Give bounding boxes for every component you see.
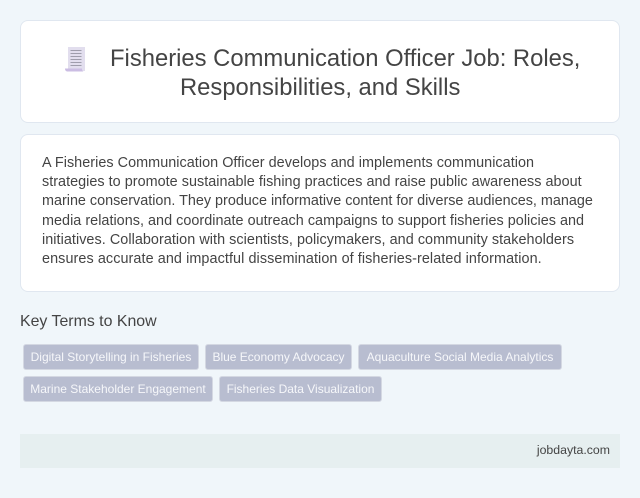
description text: A Fisheries Communication Officer develops and implements communication	[42, 155, 534, 171]
tag	[23, 376, 213, 402]
tag: Marine Stakeholder Engagement	[30, 382, 206, 396]
panel: title header	[20, 20, 620, 123]
tag	[219, 376, 382, 402]
heading: key terms: Key Terms to Know	[20, 313, 157, 330]
tag	[358, 344, 562, 370]
tag: Blue Economy Advocacy	[212, 350, 345, 364]
footer bar	[20, 434, 620, 468]
tag: Aquaculture Social Media Analytics	[367, 350, 553, 364]
description text: media relations, and coordinate outreach campaigns to support fisheries policies and	[42, 213, 584, 229]
description text: marine conservation. They produce informative content for diverse audiences, manage	[42, 193, 593, 209]
title line 1: Fisheries Communication Officer Job: Roles,	[110, 45, 580, 72]
tag: Fisheries Data Visualization	[227, 382, 374, 396]
icon: document scroll	[65, 47, 85, 72]
footer site name: jobdayta.com	[537, 443, 610, 457]
panel: description	[20, 134, 620, 292]
tag list	[23, 344, 562, 402]
description text: ensures accurate and impactful dissemination of fisheries-related information.	[42, 251, 542, 267]
description text	[42, 155, 593, 267]
description text: initiatives. Collaboration with scientists, policymakers, and community stakeholders	[42, 232, 574, 248]
tag: Digital Storytelling in Fisheries	[31, 350, 191, 364]
tag	[205, 344, 352, 370]
tag	[23, 344, 199, 370]
title line 2: Responsibilities, and Skills	[180, 74, 460, 101]
description text: strategies to promote sustainable fishing practices and raise public awareness about	[42, 174, 582, 190]
